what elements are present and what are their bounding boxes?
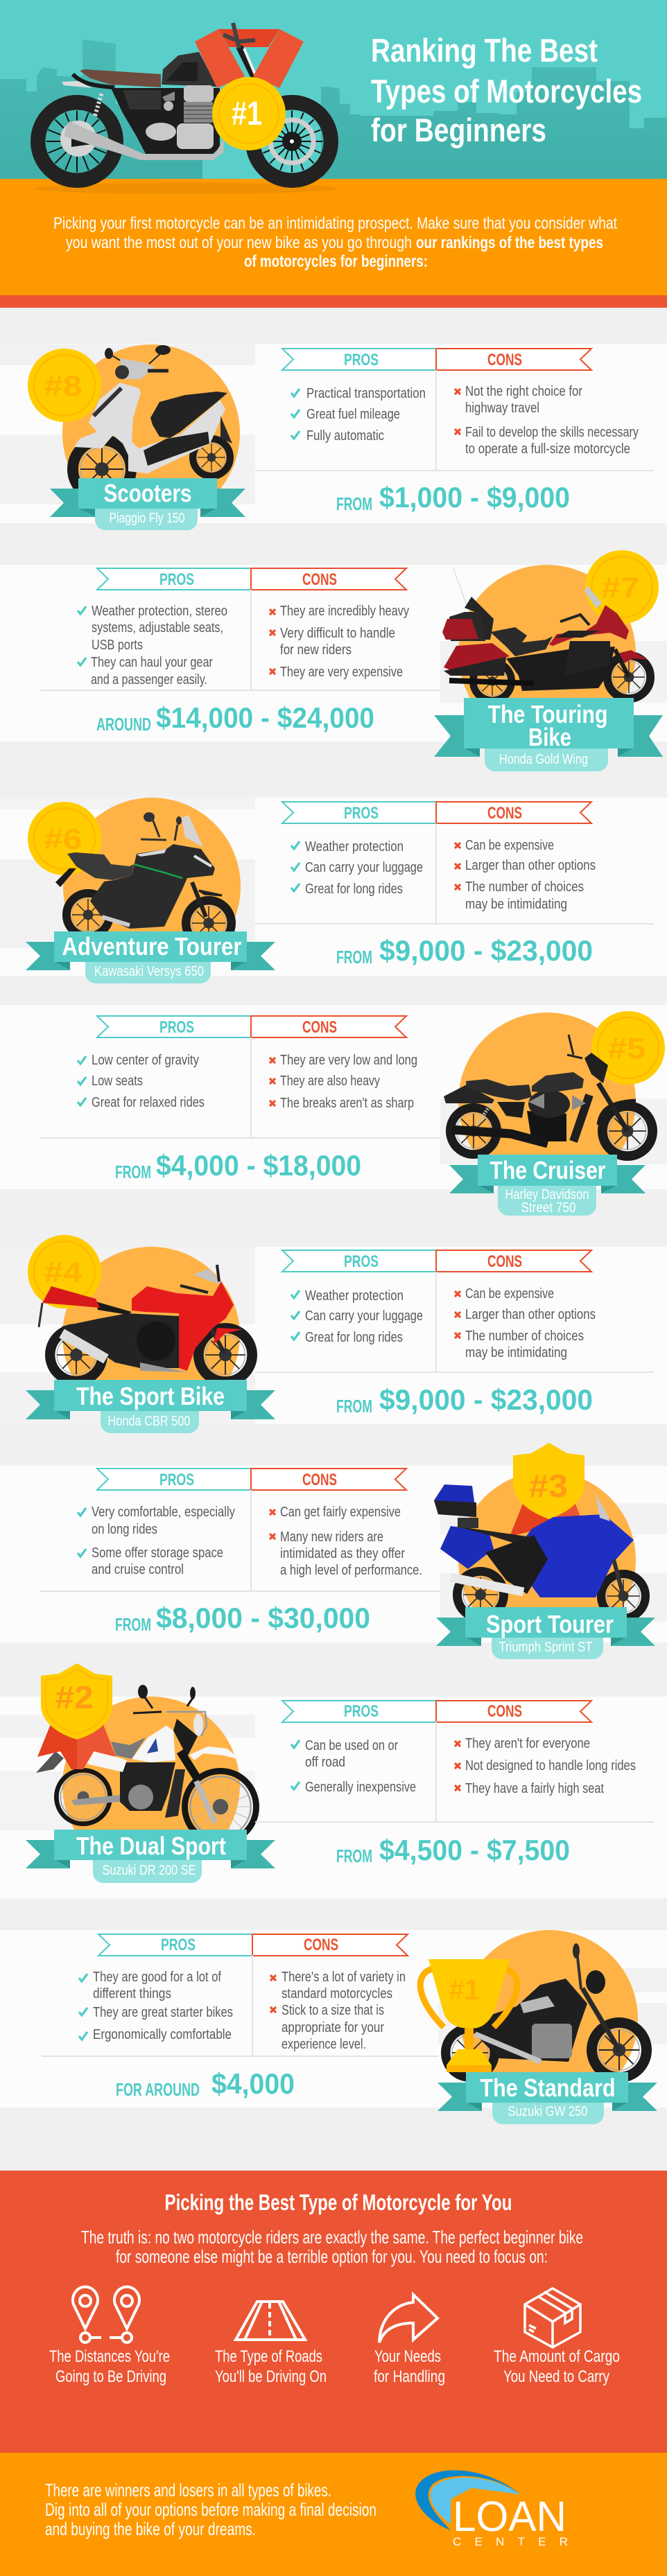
icon: cargo box (525, 2288, 580, 2347)
rank medal #6 (28, 802, 101, 875)
orange backdrop (63, 798, 241, 975)
cons list: They are very low and long (280, 1053, 417, 1068)
banner: Adventure Tourer (62, 932, 241, 961)
pros list: Weather protection (305, 839, 404, 855)
cons list (455, 1286, 596, 1360)
pros list: Can carry your luggage (305, 860, 423, 875)
banner: Sport Tourer (486, 1610, 614, 1638)
cons list: The number of choices (465, 1329, 584, 1344)
rank medal #7: #7 (602, 571, 639, 604)
trophy #1 (420, 1959, 517, 2072)
intro band (0, 179, 667, 308)
panel: the touring bike (0, 550, 667, 771)
pros list (78, 604, 227, 687)
pros and cons ribbon (97, 568, 406, 590)
rank medal #4 (28, 1235, 101, 1308)
scooter image (73, 345, 232, 498)
cons list: The number of choices (465, 879, 584, 895)
rank badge #3 (510, 1443, 588, 1549)
pros list: They are great starter bikes (93, 2005, 233, 2020)
orange backdrop (458, 1013, 636, 1190)
banner: Suzuki DR 200 SE (103, 1863, 196, 1878)
pros list: Great fuel mileage (306, 407, 400, 422)
cons list: experience level. (281, 2037, 366, 2052)
banner (50, 478, 245, 530)
intro text: of motorcycles for beginners: (244, 252, 428, 271)
loan center logo (415, 2470, 568, 2548)
closing text: There are winners and losers in all types of bikes. (45, 2480, 331, 2500)
pros and cons ribbon: CONS (487, 1252, 522, 1271)
rank medal #5 (591, 1011, 665, 1085)
rank medal #8 (28, 349, 101, 422)
panel: sport tourer (0, 1443, 667, 1659)
header: teal hero (0, 0, 667, 179)
pros list: and cruise control (92, 1562, 184, 1577)
cons list: Stick to a size that is (281, 2003, 384, 2018)
pros list (78, 1053, 205, 1110)
label: cargo: You Need to Carry (503, 2367, 609, 2386)
paragraph (81, 2227, 583, 2267)
banner: The Cruiser (490, 1156, 606, 1184)
cons list: Can be expensive (465, 1286, 554, 1302)
pros list (291, 386, 426, 444)
orange backdrop (62, 1247, 240, 1424)
banner (436, 1607, 655, 1659)
pros list: They are good for a lot of (93, 1970, 221, 1985)
label: handling: Your Needs (374, 2347, 441, 2366)
banner: The Dual Sport (76, 1832, 226, 1860)
label: handling: for Handling (374, 2367, 445, 2386)
price (116, 2067, 295, 2100)
hero motorcycle with medal: #1 (232, 96, 262, 132)
orange backdrop (62, 344, 240, 522)
pros list: Great for relaxed rides (92, 1095, 205, 1110)
wheels (38, 103, 116, 180)
frame and tank (111, 88, 220, 154)
cons list: appropriate for your (281, 2020, 384, 2035)
pros list: Weather protection, stereo (92, 604, 227, 619)
price: FOR AROUND (116, 2079, 200, 2100)
panel: scooters (0, 344, 667, 530)
cons list: Larger than other options (465, 1307, 596, 1322)
cons list: They have a fairly high seat (465, 1781, 604, 1796)
banner: Kawasaki Versys 650 (94, 964, 204, 979)
price: FROM (336, 1396, 372, 1417)
pros list: Low seats (92, 1074, 143, 1089)
banner (26, 1830, 275, 1883)
touring bike image (442, 567, 650, 701)
cons list: to operate a full-size motorcycle (465, 441, 630, 457)
pros list: Low center of gravity (92, 1053, 199, 1068)
pros and cons ribbon: PROS (344, 804, 379, 823)
rank medal #8: #8 (44, 369, 82, 402)
banner: Harley Davidson (505, 1187, 589, 1202)
rank medal #5: #5 (607, 1032, 646, 1064)
title (371, 32, 642, 148)
cons list: intimidated as they offer (280, 1546, 405, 1561)
cruiser image (444, 1035, 652, 1156)
cons list: Larger than other options (465, 858, 596, 873)
cons list (455, 838, 596, 912)
cons list: standard motorcycles (281, 1986, 392, 2001)
cons list: They are very expensive (280, 665, 403, 680)
price: $1,000 - $9,000 (379, 481, 570, 514)
cons list: may be intimidating (465, 897, 567, 912)
cons list: Very difficult to handle (280, 626, 395, 641)
pros list: different things (93, 1986, 171, 2001)
label: distances (49, 2347, 170, 2386)
pros list: Great for long rides (305, 1330, 403, 1345)
city skyline (0, 40, 667, 179)
banner: The Touring (488, 700, 607, 728)
standard bike image (446, 1943, 646, 2077)
rank medal #6: #6 (44, 823, 82, 855)
pros and cons ribbon: CONS (302, 1471, 337, 1489)
banner: Honda Gold Wing (499, 752, 588, 767)
banner: Piaggio Fly 150 (110, 511, 184, 526)
banner (26, 931, 275, 983)
banner (434, 698, 663, 771)
price: FROM (115, 1614, 151, 1635)
label: roads: The Type of Roads (215, 2347, 322, 2366)
pros list: Can be used on or (305, 1738, 398, 1753)
panel: the standard (0, 1930, 667, 2124)
price: $14,000 - $24,000 (156, 701, 374, 734)
banner: Street 750 (521, 1200, 575, 1216)
orange backdrop (458, 1471, 636, 1649)
banner: Triumph Sprint ST (499, 1640, 592, 1655)
pros list: Ergonomically comfortable (93, 2027, 232, 2042)
adventure bike image (55, 812, 232, 946)
cons list: They are also heavy (280, 1074, 380, 1089)
pros list (291, 1288, 423, 1345)
icon: curved arrow (379, 2295, 438, 2342)
pros and cons ribbon: PROS (344, 351, 379, 369)
hero motorcycle with medal (33, 23, 338, 194)
cons list (270, 604, 409, 680)
rank medal #4: #4 (44, 1256, 83, 1288)
price: $9,000 - $23,000 (379, 1383, 593, 1416)
pros list: Weather protection (305, 1288, 404, 1304)
cons list: They aren't for everyone (465, 1736, 590, 1751)
pros and cons ribbon: CONS (487, 804, 522, 823)
icon: road (236, 2302, 305, 2340)
cons list: highway travel (465, 401, 539, 416)
label: cargo: The Amount of Cargo (494, 2347, 620, 2366)
pros and cons ribbon: CONS (304, 1936, 338, 1954)
cons list (270, 1970, 406, 2052)
price: FROM (336, 493, 372, 514)
closing text (45, 2480, 376, 2539)
price: AROUND (96, 714, 151, 735)
banner (438, 2072, 657, 2124)
cons list: for new riders (280, 642, 352, 658)
pros and cons ribbon (282, 802, 591, 823)
trophy #1: #1 (449, 1973, 480, 2006)
pros and cons ribbon (282, 1701, 591, 1722)
pros and cons ribbon (97, 1016, 406, 1037)
orange backdrop (460, 1930, 638, 2108)
banner: The Sport Bike (76, 1382, 225, 1410)
intro text (53, 214, 617, 271)
rank badge #3: #3 (529, 1468, 568, 1504)
panel: picking the best type (0, 2171, 667, 2453)
pros list: Generally inexpensive (305, 1780, 416, 1795)
cons list: Not the right choice for (465, 384, 582, 399)
pros list (291, 839, 423, 897)
pros list: off road (305, 1755, 345, 1770)
rank badge #2: #2 (55, 1679, 93, 1715)
orange backdrop (62, 1697, 240, 1874)
banner: Honda CBR 500 (108, 1414, 190, 1429)
intro text: you want the most out of your new bike as you go through (66, 234, 412, 252)
price: $8,000 - $30,000 (156, 1602, 370, 1634)
cons list: a high level of performance. (280, 1563, 422, 1578)
cons list: They are incredibly heavy (280, 604, 409, 619)
pros and cons ribbon (282, 349, 591, 370)
label: roads (215, 2347, 327, 2386)
pros and cons ribbon: CONS (487, 1702, 522, 1721)
pros and cons ribbon: PROS (344, 1252, 379, 1271)
cons list (270, 1053, 417, 1111)
pros list: Great for long rides (305, 882, 403, 897)
dual sport image (36, 1685, 257, 1843)
cons list: Not designed to handle long rides (465, 1758, 636, 1773)
sport bike image (39, 1265, 252, 1382)
fork and bars (239, 46, 254, 78)
banner (26, 1380, 275, 1433)
pros and cons ribbon (282, 1250, 591, 1272)
label: handling (374, 2347, 445, 2386)
banner: Scooters (104, 479, 191, 507)
pros and cons ribbon: PROS (159, 1018, 194, 1037)
title: for Beginners (371, 112, 546, 148)
price: FROM (336, 1846, 372, 1866)
sport tourer image (434, 1484, 646, 1618)
pros list (78, 1505, 235, 1577)
pros list: Practical transportation (306, 386, 426, 401)
rank medal #7 (585, 550, 659, 624)
price: FROM (115, 1162, 151, 1182)
pros list: on long rides (92, 1522, 157, 1537)
back ribbon (218, 29, 279, 47)
closing text: and buying the bike of your dreams. (45, 2518, 256, 2539)
cons list: may be intimidating (465, 1345, 567, 1360)
pros list: Some offer storage space (92, 1545, 223, 1561)
panel: the dual sport (0, 1663, 667, 1898)
banner: Bike (528, 723, 571, 751)
panel: the cruiser (0, 1005, 667, 1216)
cons list: Can get fairly expensive (280, 1505, 401, 1520)
pros list: USB ports (92, 638, 143, 653)
cons list: The breaks aren't as sharp (280, 1096, 414, 1111)
label: roads: You'll be Driving On (215, 2367, 327, 2386)
banner: The Standard (480, 2074, 616, 2102)
pros list: Can carry your luggage (305, 1308, 423, 1324)
front ribbon (195, 29, 304, 88)
icon: map pins and route (73, 2287, 139, 2342)
price: $4,000 - $18,000 (156, 1149, 361, 1182)
cons list (455, 1736, 636, 1796)
banner: Suzuki GW 250 (508, 2104, 588, 2119)
pros list: systems, adjustable seats, (92, 620, 223, 636)
pros and cons ribbon: PROS (159, 1471, 194, 1489)
intro text: our rankings of the best types (416, 234, 603, 252)
panel: the sport bike (0, 1235, 667, 1433)
rank badge #2 (37, 1663, 116, 1769)
pros and cons ribbon: PROS (159, 570, 194, 589)
pros and cons ribbon: CONS (487, 351, 522, 369)
label: distances: The Distances You're (49, 2347, 170, 2366)
cons list (270, 1505, 422, 1578)
banner (449, 1155, 646, 1216)
pros and cons ribbon: PROS (161, 1936, 196, 1954)
cons list: Can be expensive (465, 838, 554, 853)
loan center logo: LOAN (453, 2493, 566, 2540)
label: cargo (494, 2347, 620, 2386)
title: Ranking The Best (371, 32, 598, 69)
pros list (291, 1738, 416, 1795)
pros and cons ribbon: PROS (344, 1702, 379, 1721)
cons list: There's a lot of variety in (281, 1970, 406, 1985)
pros and cons ribbon: CONS (302, 1018, 337, 1037)
closing text: Dig into all of your options before making a final decision (45, 2499, 376, 2520)
pros list: Fully automatic (306, 428, 384, 444)
pros list: They can haul your gear (91, 655, 213, 670)
panel: adventure tourer (0, 798, 667, 983)
loan center logo: CENTER (453, 2535, 568, 2548)
pros and cons ribbon: CONS (302, 570, 337, 589)
pros list: and a passenger easily. (91, 672, 207, 687)
cons list (455, 384, 639, 457)
pros and cons ribbon (97, 1469, 406, 1490)
footer band (0, 2453, 667, 2576)
pros and cons ribbon (98, 1934, 408, 1956)
cons list: Many new riders are (280, 1530, 383, 1545)
orange backdrop (458, 565, 636, 742)
price: $9,000 - $23,000 (379, 934, 593, 967)
price: $4,000 (211, 2067, 295, 2100)
price: $4,500 - $7,500 (379, 1834, 570, 1866)
label: distances: Going to Be Driving (55, 2367, 166, 2386)
pros list (79, 1970, 233, 2042)
price: FROM (336, 947, 372, 967)
pros list: Very comfortable, especially (92, 1505, 235, 1520)
heading: Picking the Best Type of Motorcycle for You (165, 2190, 512, 2215)
